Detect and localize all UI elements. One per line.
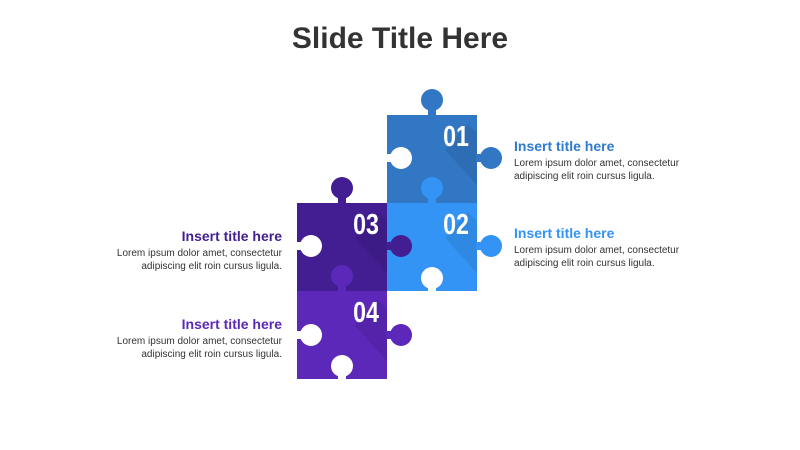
text block 02: [514, 225, 679, 269]
piece 04: [297, 265, 412, 380]
text block 02: Lorem ipsum dolor amet, consectetur adipiscing elit roin cursus ligula.: [514, 245, 679, 269]
text block 04: Lorem ipsum dolor amet, consectetur adipiscing elit roin cursus ligula.: [117, 336, 282, 360]
piece 01: [387, 89, 502, 203]
text block 01: [514, 138, 679, 182]
text block 04: Insert title here: [182, 316, 282, 332]
piece 03: [297, 177, 412, 291]
piece 04: 04: [353, 295, 379, 329]
text block 02: Insert title here: [514, 225, 614, 241]
text block 01: Insert title here: [514, 138, 614, 154]
text block 03: [117, 228, 282, 272]
text block 01: Lorem ipsum dolor amet, consectetur adipiscing elit roin cursus ligula.: [514, 158, 679, 182]
title: Slide Title Here: [292, 22, 508, 55]
text block 03: Insert title here: [182, 228, 282, 244]
piece 01: 01: [443, 119, 469, 153]
piece 03: 03: [353, 207, 379, 241]
piece 02: 02: [443, 207, 469, 241]
text block 04: [117, 316, 282, 360]
text block 03: Lorem ipsum dolor amet, consectetur adipiscing elit roin cursus ligula.: [117, 248, 282, 272]
piece 02: [387, 177, 502, 292]
